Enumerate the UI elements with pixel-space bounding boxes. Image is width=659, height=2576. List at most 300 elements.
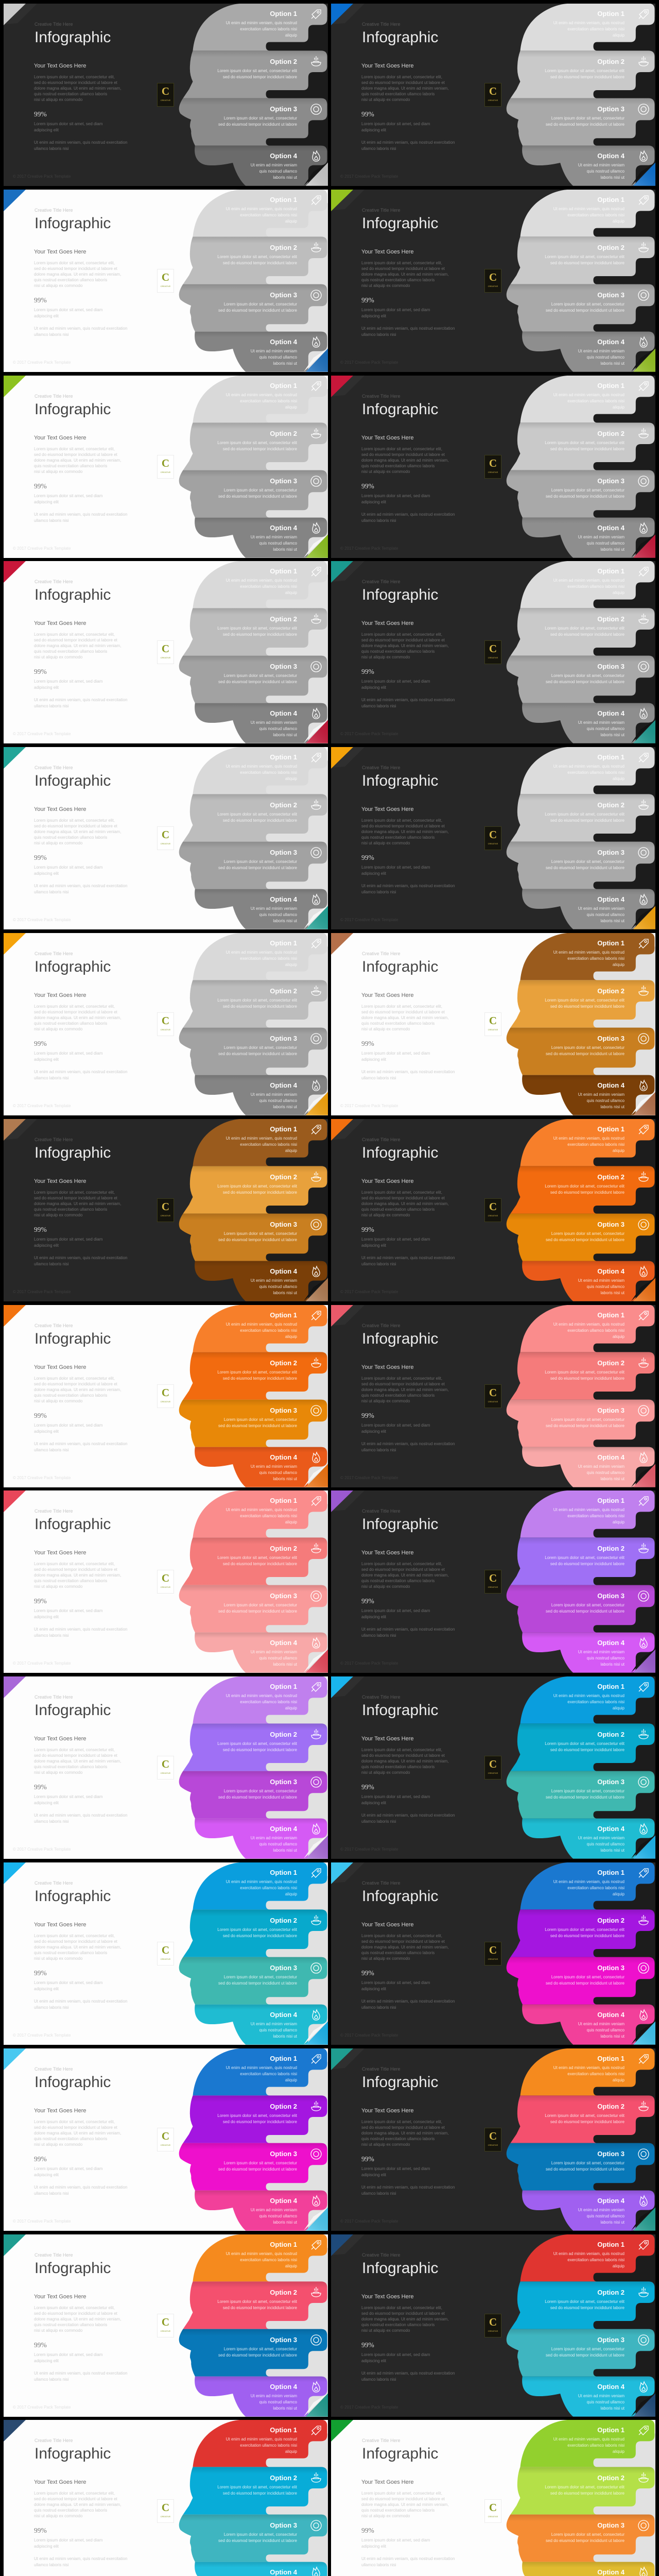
logo: C [489, 2501, 497, 2514]
logo: C [162, 2501, 169, 2514]
footer: © 2017 Creative Pack Template [340, 1290, 398, 1294]
option 1: Ut enim ad minim veniam, quis nostrud exercitation ullamco laboris nisi aliquip [553, 1136, 625, 1153]
logo [157, 455, 174, 479]
option 4 [174, 895, 297, 924]
body text: Lorem ipsum dolor sit amet, consectetur elit, sed do eiusmod tempor incididunt ut labore et dolore magna aliqua. Ut enim ad minim veniam, quis nostrud exercitation ullamco laboris nisi ut aliquip ex commodo [34, 1376, 121, 1403]
option 1: Option 1 [597, 382, 625, 389]
option 4: Ut enim ad minim veniam quis nostrud ullamco laboris nisi ut [578, 1464, 625, 1481]
subheading: Your Text Goes Here [361, 992, 414, 998]
option 1: Option 1 [270, 1683, 297, 1690]
corner tab [331, 2420, 353, 2442]
note: Ut enim ad minim veniam, quis nostrud exercitation ullamco laboris nisi [361, 512, 455, 523]
option 4 [174, 338, 297, 366]
icon: flame [310, 336, 322, 348]
option 1: Option 1 [597, 939, 625, 947]
icon: target [310, 289, 322, 301]
option 4: Ut enim ad minim veniam quis nostrud ullamco laboris nisi ut [251, 720, 297, 737]
head silhouette [4, 2420, 328, 2576]
option 4: Ut enim ad minim veniam quis nostrud ullamco laboris nisi ut [578, 2022, 625, 2039]
body text: Lorem ipsum dolor sit amet, consectetur elit, sed do eiusmod tempor incididunt ut labore et dolore magna aliqua. Ut enim ad minim veniam, quis nostrud exercitation ullamco laboris nisi ut aliquip ex commodo [34, 1748, 121, 1775]
option 4: Option 4 [597, 2383, 625, 2391]
logo [157, 1570, 174, 1594]
option 3: Option 3 [270, 291, 297, 299]
option 1: Ut enim ad minim veniam, quis nostrud exercitation ullamco laboris nisi aliquip [226, 578, 297, 595]
option 3: Lorem ipsum dolor sit amet, consectetur sed do eiusmod tempor incididunt ut labore [546, 302, 625, 313]
option 1 [553, 10, 625, 38]
option 4 [174, 1267, 297, 1296]
subheading: Your Text Goes Here [34, 806, 86, 812]
option 3 [501, 2521, 625, 2544]
stat caption: Lorem ipsum dolor sit amet, sed diam adipiscing elit [34, 494, 102, 504]
option 4: Ut enim ad minim veniam quis nostrud ullamco laboris nisi ut [578, 720, 625, 737]
icon: flame [637, 336, 650, 348]
option 1: Ut enim ad minim veniam, quis nostrud exercitation ullamco laboris nisi aliquip [226, 1693, 297, 1710]
note: Ut enim ad minim veniam, quis nostrud exercitation ullamco laboris nisi [34, 2185, 127, 2196]
panel: slide 14 [331, 1119, 655, 1301]
logo: C [162, 1014, 169, 1027]
head silhouette [331, 1305, 655, 1487]
option 1: Option 1 [597, 567, 625, 575]
panel: slide 17 [4, 1490, 328, 1673]
body text: Lorem ipsum dolor sit amet, consectetur elit, sed do eiusmod tempor incididunt ut labore et dolore magna aliqua. Ut enim ad minim veniam, quis nostrud exercitation ullamco laboris nisi ut aliquip ex commodo [34, 818, 121, 845]
option 4: Option 4 [597, 2197, 625, 2205]
eyebrow: Creative Title Here [362, 2066, 401, 2072]
logo: CREATIVE [161, 1400, 170, 1403]
icon: bowl [637, 1171, 650, 1183]
title: Infographic [362, 1702, 438, 1719]
option 2: Lorem ipsum dolor sit amet, consectetur elit sed do eiusmod tempor incididunt labore [545, 626, 625, 637]
logo: CREATIVE [488, 1028, 498, 1031]
option 1 [501, 1497, 625, 1525]
option 2: Option 2 [597, 2103, 625, 2110]
panel: slide 3 [4, 190, 328, 372]
head silhouette [4, 2234, 328, 2417]
option 3 [174, 1778, 297, 1801]
logo: CREATIVE [488, 2515, 498, 2518]
logo [484, 83, 501, 107]
subheading: Your Text Goes Here [361, 2108, 414, 2114]
option 3: Option 3 [270, 663, 297, 670]
icon: rocket [637, 2239, 650, 2251]
logo [484, 1942, 501, 1965]
head silhouette [331, 747, 655, 929]
corner tab [331, 1862, 353, 1884]
logo [157, 2499, 174, 2523]
note: Ut enim ad minim veniam, quis nostrud exercitation ullamco laboris nisi [34, 1813, 127, 1824]
option 4 [501, 709, 625, 738]
option 1: Option 1 [270, 753, 297, 761]
icon: flame [310, 1451, 322, 1464]
option 4 [174, 524, 297, 552]
body text: Lorem ipsum dolor sit amet, consectetur elit, sed do eiusmod tempor incididunt ut labore et dolore magna aliqua. Ut enim ad minim veniam, quis nostrud exercitation ullamco laboris nisi ut aliquip ex commodo [361, 1376, 448, 1403]
logo: CREATIVE [488, 1214, 498, 1217]
option 1: Option 1 [597, 2055, 625, 2062]
option 2 [501, 1917, 625, 1939]
icon: flame [310, 1823, 322, 1835]
footer: © 2017 Creative Pack Template [13, 1476, 71, 1480]
option 1: Option 1 [270, 10, 297, 18]
eyebrow: Creative Title Here [362, 22, 401, 27]
icon: rocket [637, 1495, 650, 1507]
option 2: Lorem ipsum dolor sit amet, consectetur elit sed do eiusmod tempor incididunt labore [217, 440, 297, 451]
option 1: Option 1 [270, 567, 297, 575]
stat caption: Lorem ipsum dolor sit amet, sed diam adipiscing elit [34, 1237, 102, 1248]
option 3: Lorem ipsum dolor sit amet, consectetur sed do eiusmod tempor incididunt ut labore [218, 2532, 297, 2543]
body text: Lorem ipsum dolor sit amet, consectetur elit, sed do eiusmod tempor incididunt ut labore et dolore magna aliqua. Ut enim ad minim veniam, quis nostrud exercitation ullamco laboris nisi ut aliquip ex commodo [361, 818, 448, 845]
option 1 [174, 1125, 297, 1154]
option 1 [174, 939, 297, 968]
panel: slide 19 [4, 1676, 328, 1859]
option 1: Option 1 [597, 2426, 625, 2434]
icon: flame [310, 2009, 322, 2021]
eyebrow: Creative Title Here [362, 1323, 401, 1328]
option 1 [501, 567, 625, 596]
option 2: Lorem ipsum dolor sit amet, consectetur elit sed do eiusmod tempor incididunt labore [217, 2299, 297, 2310]
corner tab [4, 1676, 26, 1698]
option 4: Option 4 [270, 524, 297, 532]
option 4 [501, 2011, 625, 2039]
option 3: Lorem ipsum dolor sit amet, consectetur sed do eiusmod tempor incididunt ut labore [546, 1789, 625, 1800]
head silhouette [4, 1305, 328, 1487]
head silhouette [179, 190, 328, 372]
icon: rocket [310, 1867, 322, 1879]
option 3: Lorem ipsum dolor sit amet, consectetur sed do eiusmod tempor incididunt ut labore [218, 1975, 297, 1986]
option 1: Ut enim ad minim veniam, quis nostrud exercitation ullamco laboris nisi aliquip [226, 1879, 297, 1896]
icon: target [310, 104, 322, 115]
stat caption: Lorem ipsum dolor sit amet, sed diam adipiscing elit [34, 2352, 102, 2363]
option 4: Option 4 [597, 152, 625, 160]
eyebrow: Creative Title Here [34, 2438, 73, 2443]
stat: 99% [34, 2341, 47, 2349]
panel: slide 11 [4, 933, 328, 1115]
logo: C [489, 2316, 497, 2328]
logo: CREATIVE [161, 2515, 170, 2518]
head silhouette [4, 376, 328, 558]
footer: © 2017 Creative Pack Template [13, 2405, 71, 2410]
option 4: Ut enim ad minim veniam quis nostrud ullamco laboris nisi ut [251, 535, 297, 552]
option 3: Lorem ipsum dolor sit amet, consectetur sed do eiusmod tempor incididunt ut labore [218, 1417, 297, 1428]
body text: Lorem ipsum dolor sit amet, consectetur elit, sed do eiusmod tempor incididunt ut labore et dolore magna aliqua. Ut enim ad minim veniam, quis nostrud exercitation ullamco laboris nisi ut aliquip ex commodo [34, 75, 121, 102]
body text: Lorem ipsum dolor sit amet, consectetur elit, sed do eiusmod tempor incididunt ut labore et dolore magna aliqua. Ut enim ad minim veniam, quis nostrud exercitation ullamco laboris nisi ut aliquip ex commodo [361, 1934, 448, 1961]
option 4 [174, 709, 297, 738]
eyebrow: Creative Title Here [34, 1323, 73, 1328]
option 2: Lorem ipsum dolor sit amet, consectetur elit sed do eiusmod tempor incididunt labore [545, 69, 625, 79]
footer: © 2017 Creative Pack Template [340, 732, 398, 736]
option 3: Lorem ipsum dolor sit amet, consectetur sed do eiusmod tempor incididunt ut labore [546, 116, 625, 127]
option 3: Option 3 [270, 1035, 297, 1042]
eyebrow: Creative Title Here [34, 2066, 73, 2072]
head silhouette [4, 2048, 328, 2231]
subheading: Your Text Goes Here [34, 1736, 86, 1742]
option 4: Option 4 [270, 1453, 297, 1461]
logo: C [162, 85, 169, 97]
option 1: Ut enim ad minim veniam, quis nostrud exercitation ullamco laboris nisi aliquip [553, 2065, 625, 2082]
panel: slide 23 [4, 2048, 328, 2231]
option 4: Ut enim ad minim veniam quis nostrud ullamco laboris nisi ut [251, 906, 297, 923]
icon: target [637, 1218, 650, 1231]
option 3: Lorem ipsum dolor sit amet, consectetur sed do eiusmod tempor incididunt ut labore [218, 673, 297, 684]
option 3: Lorem ipsum dolor sit amet, consectetur sed do eiusmod tempor incididunt ut labore [218, 859, 297, 870]
option 4: Ut enim ad minim veniam quis nostrud ullamco laboris nisi ut [251, 1092, 297, 1109]
eyebrow: Creative Title Here [34, 2252, 73, 2258]
option 3 [174, 2150, 297, 2173]
head silhouette [4, 933, 328, 1115]
option 2: Lorem ipsum dolor sit amet, consectetur elit sed do eiusmod tempor incididunt labore [545, 1927, 625, 1938]
stat: 99% [361, 1226, 374, 1233]
icon: bowl [310, 613, 322, 625]
option 3: Option 3 [270, 2521, 297, 2529]
logo [484, 269, 501, 293]
eyebrow: Creative Title Here [362, 208, 401, 213]
option 2 [501, 1731, 625, 1753]
option 3 [501, 1035, 625, 1057]
option 2 [174, 987, 297, 1010]
corner tab [4, 1305, 26, 1327]
logo: C [489, 1386, 497, 1399]
subheading: Your Text Goes Here [361, 249, 414, 255]
icon: bowl [637, 985, 650, 997]
option 1: Ut enim ad minim veniam, quis nostrud exercitation ullamco laboris nisi aliquip [226, 207, 297, 224]
logo: C [489, 271, 497, 283]
logo [157, 2314, 174, 2337]
icon: bowl [637, 1357, 650, 1369]
option 3 [501, 1592, 625, 1615]
stat: 99% [34, 1783, 47, 1791]
icon: bowl [310, 428, 322, 440]
logo: C [162, 1758, 169, 1770]
option 3: Option 3 [597, 1592, 625, 1600]
body text: Lorem ipsum dolor sit amet, consectetur elit, sed do eiusmod tempor incididunt ut labore et dolore magna aliqua. Ut enim ad minim veniam, quis nostrud exercitation ullamco laboris nisi ut aliquip ex commodo [34, 1562, 121, 1589]
icon: bowl [637, 428, 650, 440]
stat: 99% [361, 1597, 374, 1605]
stat: 99% [34, 1597, 47, 1605]
panel: slide 18 [331, 1490, 655, 1673]
eyebrow: Creative Title Here [34, 765, 73, 770]
head silhouette [331, 933, 655, 1115]
option 3: Option 3 [270, 2150, 297, 2158]
option 1: Ut enim ad minim veniam, quis nostrud exercitation ullamco laboris nisi aliquip [226, 21, 297, 38]
option 2: Lorem ipsum dolor sit amet, consectetur elit sed do eiusmod tempor incididunt labore [217, 1184, 297, 1195]
note: Ut enim ad minim veniam, quis nostrud exercitation ullamco laboris nisi [361, 1627, 455, 1638]
icon: target [637, 475, 650, 487]
option 2: Option 2 [597, 615, 625, 623]
option 4: Option 4 [597, 709, 625, 717]
icon: rocket [637, 1123, 650, 1136]
option 3 [174, 477, 297, 500]
option 3: Lorem ipsum dolor sit amet, consectetur sed do eiusmod tempor incididunt ut labore [546, 1231, 625, 1242]
icon: bowl [310, 1171, 322, 1183]
eyebrow: Creative Title Here [362, 2252, 401, 2258]
footer: © 2017 Creative Pack Template [340, 1661, 398, 1666]
logo [157, 1756, 174, 1780]
option 4: Ut enim ad minim veniam quis nostrud ullamco laboris nisi ut [578, 163, 625, 180]
logo: CREATIVE [488, 285, 498, 287]
option 1: Ut enim ad minim veniam, quis nostrud exercitation ullamco laboris nisi aliquip [226, 1322, 297, 1339]
option 2 [174, 2289, 297, 2311]
icon: bowl [310, 2472, 322, 2484]
option 4: Option 4 [270, 709, 297, 717]
option 2: Lorem ipsum dolor sit amet, consectetur elit sed do eiusmod tempor incididunt labore [545, 440, 625, 451]
option 2: Option 2 [270, 2289, 297, 2296]
stat: 99% [361, 668, 374, 675]
option 2 [174, 1731, 297, 1753]
logo [157, 640, 174, 664]
option 3: Option 3 [270, 477, 297, 485]
option 2: Lorem ipsum dolor sit amet, consectetur elit sed do eiusmod tempor incididunt labore [545, 2113, 625, 2124]
body text: Lorem ipsum dolor sit amet, consectetur elit, sed do eiusmod tempor incididunt ut labore et dolore magna aliqua. Ut enim ad minim veniam, quis nostrud exercitation ullamco laboris nisi ut aliquip ex commodo [34, 447, 121, 474]
icon: flame [310, 2381, 322, 2393]
option 2: Option 2 [597, 1731, 625, 1738]
option 4 [251, 152, 297, 180]
eyebrow: Creative Title Here [34, 1880, 73, 1886]
icon: rocket [637, 380, 650, 392]
subheading: Your Text Goes Here [361, 1736, 414, 1742]
stat: 99% [361, 1969, 374, 1977]
corner tab [331, 561, 353, 583]
eyebrow: Creative Title Here [34, 951, 73, 956]
option 4: Option 4 [597, 1267, 625, 1275]
option 1: Option 1 [270, 939, 297, 947]
option 4 [174, 1453, 297, 1482]
icon: rocket [310, 2424, 322, 2436]
icon: target [637, 2148, 650, 2160]
title: Infographic [362, 215, 438, 232]
option 3: Lorem ipsum dolor sit amet, consectetur sed do eiusmod tempor incididunt ut labore [546, 488, 625, 499]
title: Infographic [362, 2260, 438, 2277]
note: Ut enim ad minim veniam, quis nostrud exercitation ullamco laboris nisi [34, 2371, 127, 2382]
head silhouette [331, 1119, 655, 1301]
subheading: Your Text Goes Here [34, 1364, 86, 1370]
stat: 99% [361, 1783, 374, 1791]
icon: target [310, 475, 322, 487]
icon: bowl [310, 985, 322, 997]
stat: 99% [34, 854, 47, 861]
option 4: Option 4 [270, 1825, 297, 1833]
stat: 99% [361, 2527, 374, 2534]
stat caption: Lorem ipsum dolor sit amet, sed diam adipiscing elit [361, 1051, 430, 1061]
option 1: Option 1 [597, 1869, 625, 1876]
option 1 [174, 2426, 297, 2454]
icon: target [637, 289, 650, 301]
option 2: Lorem ipsum dolor sit amet, consectetur elit sed do eiusmod tempor incididunt labore [217, 626, 297, 637]
option 2: Lorem ipsum dolor sit amet, consectetur elit sed do eiusmod tempor incididunt labore [217, 1927, 297, 1938]
corner tab [4, 2234, 26, 2256]
option 4 [174, 1639, 297, 1667]
option 3: Lorem ipsum dolor sit amet, consectetur sed do eiusmod tempor incididunt ut labore [218, 302, 297, 313]
option 1: Ut enim ad minim veniam, quis nostrud exercitation ullamco laboris nisi aliquip [226, 393, 297, 410]
icon: bowl [310, 242, 322, 254]
stat caption: Lorem ipsum dolor sit amet, sed diam adipiscing elit [361, 1423, 430, 1433]
logo: CREATIVE [488, 2330, 498, 2332]
icon: target [310, 1032, 322, 1045]
logo: C [489, 1014, 497, 1027]
icon: flame [310, 707, 322, 720]
note: Ut enim ad minim veniam, quis nostrud exercitation ullamco laboris nisi [34, 1256, 127, 1266]
option 3: Lorem ipsum dolor sit amet, consectetur sed do eiusmod tempor incididunt ut labore [218, 2161, 297, 2172]
stat caption: Lorem ipsum dolor sit amet, sed diam adipiscing elit [361, 1237, 430, 1248]
icon: flame [637, 1637, 650, 1649]
option 3: Option 3 [270, 849, 297, 856]
option 4: Ut enim ad minim veniam quis nostrud ullamco laboris nisi ut [578, 535, 625, 552]
option 3: Option 3 [597, 1406, 625, 1414]
option 3: Option 3 [270, 2336, 297, 2344]
logo: CREATIVE [488, 471, 498, 473]
option 3: Option 3 [270, 105, 297, 113]
footer: © 2017 Creative Pack Template [13, 918, 71, 922]
footer: © 2017 Creative Pack Template [340, 2219, 398, 2224]
panel: slide 25 [4, 2234, 328, 2417]
body text: Lorem ipsum dolor sit amet, consectetur elit, sed do eiusmod tempor incididunt ut labore et dolore magna aliqua. Ut enim ad minim veniam, quis nostrud exercitation ullamco laboris nisi ut aliquip ex commodo [361, 1562, 448, 1589]
logo: C [162, 271, 169, 283]
logo: CREATIVE [161, 1772, 170, 1774]
footer: © 2017 Creative Pack Template [340, 2033, 398, 2038]
icon: bowl [637, 1728, 650, 1741]
logo: C [162, 828, 169, 841]
option 3: Option 3 [270, 1406, 297, 1414]
option 3: Lorem ipsum dolor sit amet, consectetur sed do eiusmod tempor incididunt ut labore [546, 1603, 625, 1614]
option 1: Ut enim ad minim veniam, quis nostrud exercitation ullamco laboris nisi aliquip [226, 2437, 297, 2454]
logo: C [489, 85, 497, 97]
note: Ut enim ad minim veniam, quis nostrud exercitation ullamco laboris nisi [34, 326, 127, 337]
logo: C [162, 1200, 169, 1213]
eyebrow: Creative Title Here [34, 1137, 73, 1142]
panel: slide 7 [4, 561, 328, 743]
option 4 [501, 338, 625, 366]
icon: flame [637, 2195, 650, 2207]
option 2: Option 2 [597, 2289, 625, 2296]
option 3: Lorem ipsum dolor sit amet, consectetur sed do eiusmod tempor incididunt ut labore [218, 488, 297, 499]
panel: slide 6 [331, 376, 655, 558]
stat: 99% [34, 1412, 47, 1419]
option 4 [501, 1453, 625, 1482]
option 3: Lorem ipsum dolor sit amet, consectetur sed do eiusmod tempor incididunt ut labore [218, 1045, 297, 1056]
icon: bowl [311, 56, 321, 66]
option 2: Option 2 [270, 430, 297, 437]
option 2: Option 2 [597, 987, 625, 995]
stat: 99% [34, 110, 47, 118]
panel: slide 8 [331, 561, 655, 743]
subheading: Your Text Goes Here [361, 620, 414, 626]
title: Infographic [362, 958, 438, 975]
stat: 99% [34, 668, 47, 675]
icon: target [310, 846, 322, 859]
corner tab [331, 2048, 353, 2070]
stat caption: Lorem ipsum dolor sit amet, sed diam adipiscing elit [361, 308, 430, 318]
stat caption: Lorem ipsum dolor sit amet, sed diam adipiscing elit [34, 1051, 102, 1061]
stat: 99% [361, 1412, 374, 1419]
option 4 [578, 152, 625, 180]
logo: C [162, 642, 169, 655]
option 4 [174, 2011, 297, 2039]
logo: C [162, 457, 169, 469]
corner tab [4, 933, 26, 955]
stat caption: Lorem ipsum dolor sit amet, sed diam adipiscing elit [34, 1608, 102, 1619]
option 1 [501, 1683, 625, 1711]
corner tab [331, 376, 353, 397]
option 2: Lorem ipsum dolor sit amet, consectetur elit sed do eiusmod tempor incididunt labore [545, 1741, 625, 1752]
note: Ut enim ad minim veniam, quis nostrud exercitation ullamco laboris nisi [361, 1999, 455, 2010]
head silhouette [331, 2234, 655, 2417]
logo [484, 640, 501, 664]
option 2: Lorem ipsum dolor sit amet, consectetur elit sed do eiusmod tempor incididunt labore [545, 2299, 625, 2310]
option 1: Option 1 [270, 382, 297, 389]
icon: flame [637, 522, 650, 534]
icon: flame [637, 707, 650, 720]
note: Ut enim ad minim veniam, quis nostrud exercitation ullamco laboris nisi [361, 2185, 455, 2196]
icon: target [310, 2519, 322, 2532]
logo: CREATIVE [488, 1586, 498, 1588]
icon: rocket [310, 380, 322, 392]
